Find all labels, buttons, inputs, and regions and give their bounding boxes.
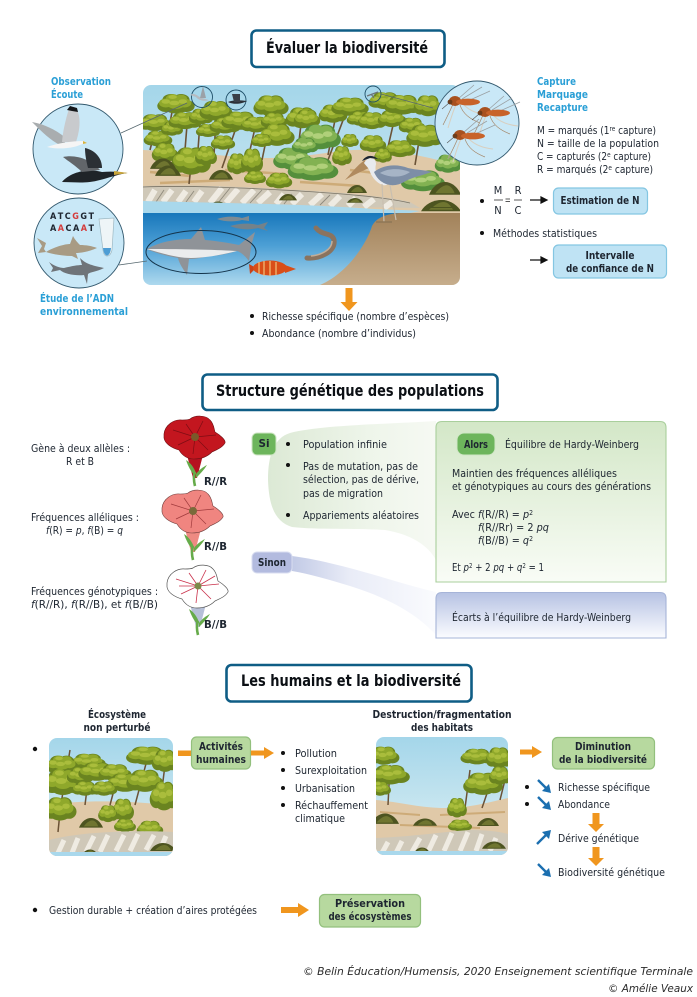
- panel: alors: 2: [522, 562, 526, 570]
- text: fréquences génotypiques: Fréquences génotypiques :: [31, 585, 158, 598]
- panel: alors: 2: [529, 509, 533, 517]
- label: observation écoute: Observation: [51, 75, 111, 88]
- title: les humains: [226, 665, 472, 702]
- text: definitions: [537, 124, 659, 176]
- arrows: orange down: [588, 813, 604, 866]
- list: effects: Dérive génétique: [558, 832, 639, 845]
- heron: [345, 156, 432, 222]
- arrows: blue trend: [537, 780, 551, 877]
- text: méthodes statistiques: Méthodes statistiques: [493, 227, 597, 240]
- icon: pink flower: [162, 490, 223, 560]
- label: capture marquage recapture: Capture: [537, 75, 576, 88]
- panel: écarts: Écarts à l’équilibre de Hardy-Weinberg: [452, 611, 631, 624]
- label: R//R: R//R: [204, 475, 227, 488]
- list: conditions: pas de migration: [303, 487, 383, 500]
- box: activités humaines: [192, 737, 250, 769]
- sea: [143, 213, 403, 285]
- icon: DNA circle with sharks and tube: [34, 198, 124, 288]
- text: fréquences alléliques: Fréquences alléliques :: [31, 511, 139, 524]
- heading: destruction: [372, 708, 512, 734]
- formula M/N = R/C: [480, 184, 522, 217]
- text: fréquences génotypiques: [31, 585, 158, 611]
- text: definitions: e: [608, 164, 612, 172]
- box: intervalle de confiance: Intervalle: [586, 249, 635, 262]
- icon: red flower: [164, 416, 225, 486]
- ellipse around shark: [146, 230, 256, 274]
- text: definitions: re: [610, 125, 615, 133]
- label: ADN environnemental: Étude de l’ADN: [40, 292, 114, 305]
- shape: si bubble: [268, 421, 436, 560]
- title: Évaluer la biodiversité: [252, 30, 444, 67]
- panel: alors: Et p: [452, 561, 470, 574]
- heading: écosystème: non perturbé: [84, 721, 151, 734]
- box: intervalle de confiance: de confiance de N: [566, 262, 654, 275]
- shape: sinon trail: [292, 556, 436, 635]
- text: definitions: capture): [611, 150, 651, 163]
- heron feet and signature: [376, 221, 392, 223]
- box: si: [252, 433, 276, 455]
- credits: © Belin Éducation/Humensis, 2020 Enseignement scientifique Terminale: [303, 965, 693, 978]
- panel: ecosystem scene: [138, 85, 461, 285]
- icon: DNA circle with sharks and tube: A A C A A T: [50, 224, 94, 234]
- box: intervalle de confiance: [554, 245, 666, 278]
- arrow: orange down: [340, 288, 358, 311]
- panel: alors: + 2: [472, 561, 493, 574]
- box: estimation de N: Estimation de N: [560, 194, 640, 207]
- text: richesse et abondance: Richesse spécifique (nombre d’espèces): [262, 310, 449, 323]
- credits: © Amélie Veaux: [608, 982, 693, 995]
- formula M/N = R/C: M: [494, 184, 502, 197]
- text: definitions: e: [607, 151, 611, 159]
- pill: alors: [457, 433, 495, 455]
- label: capture marquage recapture: [537, 75, 588, 114]
- label: observation écoute: Écoute: [51, 88, 83, 101]
- title: Évaluer la biodiversité: Évaluer la biodiversité: [266, 38, 428, 57]
- formula M/N = R/C: R: [515, 184, 522, 197]
- panel: alors: 2: [469, 562, 472, 570]
- arrow: orange to activités: [178, 750, 191, 756]
- box: activités humaines: humaines: [196, 753, 246, 766]
- icon: mosquito circle: [435, 81, 520, 165]
- label: capture marquage recapture: Recapture: [537, 101, 588, 114]
- image: écosystème non perturbé: [43, 738, 178, 856]
- arrow: orange from activités: [251, 747, 274, 759]
- text: richesse et abondance: [250, 310, 449, 340]
- title: structure génétique: Structure génétique des populations: [216, 381, 484, 400]
- text: gène à deux allèles: Gène à deux allèles :: [31, 442, 130, 455]
- box: diminution: de la biodiversité: [559, 753, 647, 766]
- list: conditions: [286, 438, 419, 522]
- bank: [320, 213, 460, 285]
- label: ADN environnemental: [40, 292, 128, 318]
- list: conditions: Appariements aléatoires: [303, 509, 419, 522]
- shark: [147, 227, 255, 275]
- text: definitions: M = marqués (1: [537, 124, 617, 137]
- box: activités humaines: Activités: [199, 740, 243, 753]
- panel: alors: [436, 422, 666, 582]
- list: effects: Richesse spécifique: [558, 781, 650, 794]
- formula M/N = R/C: N: [494, 204, 502, 217]
- panel: alors: pq + q: [493, 561, 523, 574]
- label: ADN environnemental: environnemental: [40, 305, 128, 318]
- text: definitions: C = capturés (2: [537, 150, 615, 163]
- panel: alors: Maintien des fréquences alléliques: [452, 467, 617, 480]
- arrow: orange to diminution: [520, 746, 542, 758]
- heading: destruction: des habitats: [411, 721, 473, 734]
- panel: alors: et génotypiques au cours des générations: [452, 480, 651, 493]
- box: diminution: Diminution: [575, 740, 631, 753]
- list: pressures: Réchauffement: [295, 799, 368, 812]
- list: pressures: Surexploitation: [295, 764, 367, 777]
- label: R//B: R//B: [204, 540, 227, 553]
- text: definitions: N = taille de la population: [537, 137, 659, 150]
- box: si: Si: [258, 437, 270, 450]
- panel: alors: Avec f(R//R) = p: [452, 508, 529, 521]
- icon: small bird markers: [190, 86, 381, 110]
- label: B//B: B//B: [204, 618, 227, 631]
- box: préservation: [320, 894, 420, 927]
- panel: alors: 2: [529, 535, 533, 543]
- icon: white flower: [167, 565, 228, 635]
- list: effects: Biodiversité génétique: [558, 866, 665, 879]
- arrow: orange to préservation: [281, 903, 309, 917]
- panel: alors: = 1: [526, 561, 544, 574]
- image: destruction des habitats: [369, 737, 512, 855]
- canopies: [157, 94, 195, 114]
- arrow: [530, 197, 547, 203]
- box: préservation: des écosystèmes: [328, 910, 412, 923]
- text: fréquences alléliques: f(R) = p, f(B) = q: [46, 524, 123, 537]
- text: definitions: R = marqués (2: [537, 163, 615, 176]
- box: préservation: Préservation: [335, 897, 405, 910]
- arrow: [530, 257, 547, 263]
- list: effects: Abondance: [558, 798, 610, 811]
- text: gène à deux allèles: R et B: [66, 455, 94, 468]
- label: capture marquage recapture: Marquage: [537, 88, 588, 101]
- bullet: [33, 747, 37, 751]
- trunks: [150, 108, 420, 184]
- panel: alors: f(B//B) = q: [478, 534, 529, 547]
- heading: écosystème: Écosystème: [88, 708, 146, 721]
- shallow water: [143, 201, 420, 213]
- text: gestion durable: Gestion durable + création d’aires protégées: [49, 904, 257, 917]
- formula M/N = R/C: C: [515, 204, 522, 217]
- list: pressures: Pollution: [295, 747, 337, 760]
- label: observation écoute: [51, 75, 111, 101]
- text: fréquences alléliques: [31, 511, 139, 537]
- list: pressures: [281, 747, 368, 825]
- icon: DNA circle with sharks and tube: A T C G G T: [50, 212, 94, 222]
- text: fréquences génotypiques: f(R//R), f(R//B), et f(B//B): [31, 598, 158, 611]
- leader lines: [119, 94, 433, 265]
- panel: alors: Équilibre de Hardy-Weinberg: [505, 438, 639, 451]
- heading: écosystème: [84, 708, 151, 734]
- list: pressures: Urbanisation: [295, 782, 355, 795]
- credits: [303, 965, 693, 995]
- heading: destruction: Destruction/fragmentation: [372, 708, 512, 721]
- box: sinon: Sinon: [258, 556, 286, 569]
- list: effects: [525, 781, 665, 879]
- cliff: [143, 185, 420, 208]
- text: gène à deux allèles: [31, 442, 130, 468]
- fish: [217, 216, 268, 231]
- title: structure génétique: [202, 374, 498, 410]
- list: pressures: climatique: [295, 812, 345, 825]
- text: richesse et abondance: Abondance (nombre d’individus): [262, 327, 416, 340]
- pill: alors: Alors: [464, 438, 488, 451]
- text: definitions: capture): [615, 124, 656, 137]
- box: sinon: [252, 552, 292, 573]
- title: les humains: Les humains et la biodiversité: [241, 671, 461, 690]
- icon: observation circle with birds: [32, 104, 128, 194]
- list: conditions: Pas de mutation, pas de: [303, 460, 418, 473]
- text: definitions: capture): [612, 163, 653, 176]
- panel: alors: f(R//Rr) = 2 pq: [478, 521, 549, 534]
- box: estimation de N: [554, 188, 648, 214]
- panel: écarts: [436, 592, 666, 638]
- list: conditions: sélection, pas de dérive,: [303, 473, 419, 486]
- box: diminution: [552, 738, 654, 769]
- list: conditions: Population infinie: [303, 438, 387, 451]
